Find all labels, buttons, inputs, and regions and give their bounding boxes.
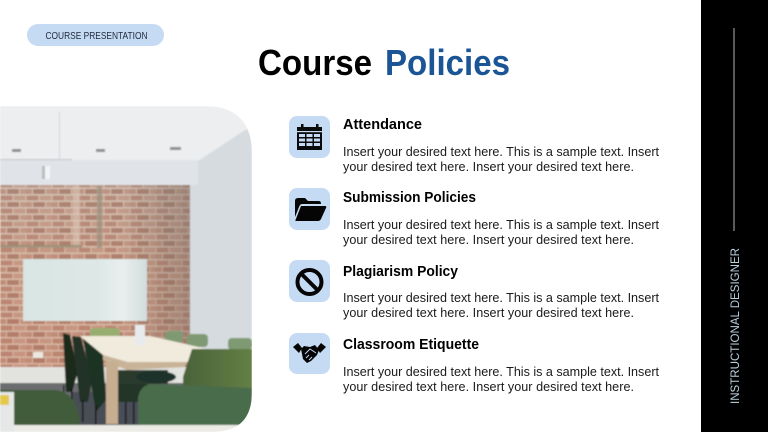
table object	[135, 325, 145, 345]
photo: meeting room	[0, 106, 252, 432]
ceiling	[0, 106, 252, 161]
body text: Insert your desired text here. This is a sample text. Insert	[343, 365, 660, 379]
title: Course	[258, 42, 372, 83]
item: plagiarism policy	[289, 260, 660, 320]
body text: Insert your desired text here. This is a sample text. Insert	[343, 291, 660, 305]
heading: Submission Policies	[343, 190, 476, 206]
body text: Insert your desired text here. This is a sample text. Insert	[343, 145, 660, 159]
body text	[343, 145, 660, 174]
badge: course presentation: COURSE PRESENTATION	[46, 31, 148, 42]
badge: course presentation	[27, 24, 164, 46]
item: submission policies	[289, 188, 660, 247]
icon: handshake	[289, 333, 330, 374]
right wall	[190, 130, 252, 350]
brick wall	[0, 185, 190, 367]
body text: your desired text here. Insert your desired text here.	[343, 306, 634, 320]
heading: Plagiarism Policy	[343, 264, 458, 280]
sidebar label: INSTRUCTIONAL DESIGNER	[728, 248, 742, 404]
item: classroom etiquette	[289, 333, 660, 394]
body text	[343, 365, 660, 394]
heading: Attendance	[343, 117, 422, 133]
title	[258, 42, 510, 83]
dark chairs	[63, 333, 78, 392]
socket	[33, 352, 43, 358]
icon: prohibited sign	[289, 260, 330, 302]
table	[80, 336, 203, 363]
body text	[343, 291, 660, 320]
icon: folder	[289, 188, 330, 230]
icon: calendar	[289, 116, 330, 158]
item: attendance	[289, 116, 660, 174]
body text: your desired text here. Insert your desired text here.	[343, 233, 634, 247]
whiteboard	[23, 259, 147, 321]
panel: black sidebar	[701, 0, 768, 432]
floor	[0, 382, 184, 398]
body text: Insert your desired text here. This is a sample text. Insert	[343, 218, 660, 232]
title: Policies	[385, 42, 510, 83]
ceiling lights	[12, 149, 21, 152]
foreground strip	[0, 425, 252, 432]
book	[0, 392, 14, 432]
heading: Classroom Etiquette	[343, 337, 479, 353]
ceiling beam	[192, 168, 197, 184]
body text: your desired text here. Insert your desired text here.	[343, 160, 634, 174]
skirting	[0, 367, 190, 383]
background chairs	[90, 328, 120, 338]
body text	[343, 218, 660, 247]
green chairs	[183, 349, 252, 392]
body text: your desired text here. Insert your desired text here.	[343, 380, 634, 394]
